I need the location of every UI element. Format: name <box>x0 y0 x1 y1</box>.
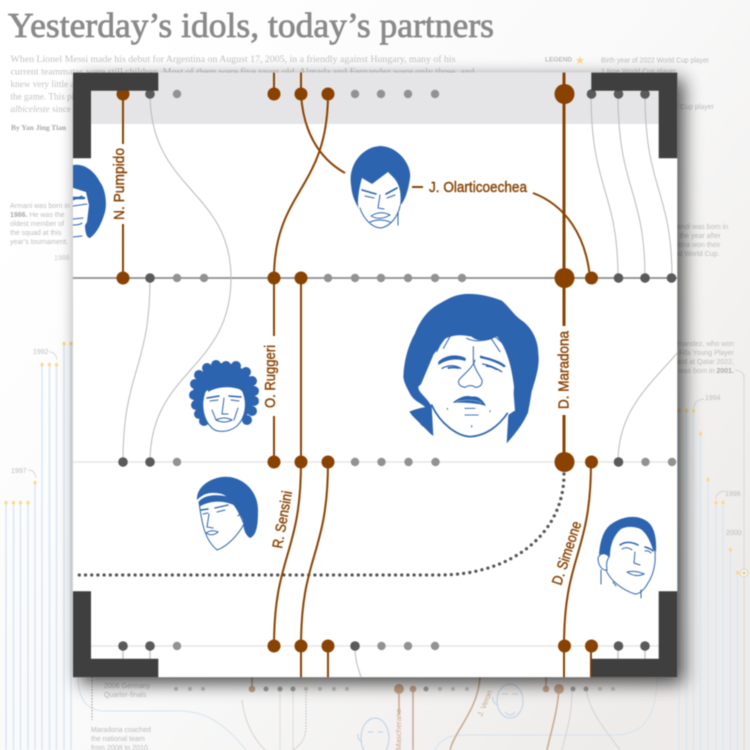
corner bracket: top right <box>591 73 677 158</box>
note: Armani: oldest member of <box>10 221 64 228</box>
grey connector lines <box>123 94 678 677</box>
label: N. Pumpido: N. Pumpido <box>112 148 128 220</box>
year lines left: 1992 <box>33 349 49 356</box>
lower faded timeline: J. Veron <box>476 689 494 718</box>
dots row 3 <box>118 452 676 472</box>
row lines <box>73 278 677 646</box>
note: Armani: year’s tournament. <box>10 239 68 246</box>
legend <box>545 54 715 111</box>
grey band <box>73 73 678 124</box>
legend: LEGEND <box>545 56 572 64</box>
corner bracket: bottom left <box>73 591 158 677</box>
intro text: When Lionel Messi made his debut for Argentina on August 17, 2005, in a friendly against Hungary, many of his <box>10 54 456 64</box>
dotted Maradona coach line <box>75 474 564 575</box>
note: Fernandez: was born in 2001. <box>678 368 734 375</box>
intro text: knew very little about <box>10 79 91 89</box>
year lines right <box>677 370 748 750</box>
lower faded timeline: 2006 Germany <box>104 683 151 690</box>
lower faded timeline: Quarter-finals <box>104 692 147 699</box>
label: R. Sensini: R. Sensini <box>270 490 296 550</box>
dots row 4 <box>118 640 650 652</box>
intro text: the game. This piece <box>10 92 86 102</box>
corner bracket: top left <box>73 73 158 158</box>
note: Armani: 1988 <box>54 255 70 262</box>
white panel <box>73 73 677 677</box>
note: Armani: 1986. He was the <box>10 212 65 219</box>
year lines left <box>4 341 73 750</box>
faded face <box>358 684 523 750</box>
note: right one: second World Cup. <box>660 251 719 258</box>
note: Armani <box>10 203 70 262</box>
legend: 1 time World Cup player <box>601 68 677 76</box>
intro text <box>10 54 475 114</box>
dots row 2 <box>116 268 676 288</box>
note: right one: Otamendi was born in <box>660 224 728 231</box>
byline: By Yan Jing Tian <box>11 123 67 132</box>
label: D. Simeone: D. Simeone <box>550 520 585 587</box>
note: right one: 1987, the year after <box>660 233 721 240</box>
lower faded timeline: Maradona coached <box>91 727 151 734</box>
portrait: Maradona <box>403 294 539 443</box>
title: Yesterday’s idols, today’s partners <box>8 6 494 45</box>
faded names: Mascherano <box>394 709 403 750</box>
note: Armani: Armani was born in <box>10 203 70 210</box>
note: Fernandez: the Fifa Young Player <box>667 350 735 357</box>
note: right one <box>660 224 728 258</box>
year lines left: 1997 <box>11 468 27 475</box>
icon: legend star: ★ <box>575 54 585 67</box>
note: Fernandez: award at Qatar 2022, <box>668 359 734 366</box>
dots row 1 <box>116 84 650 104</box>
note: right one: Argentina won their <box>660 242 721 249</box>
legend: Birth year of 2022 World Cup player <box>601 58 710 64</box>
note: Armani: the squad at this <box>10 230 62 237</box>
intro text: current teammates were still children. Most of them were five years old. Almada and Fernandez were only three, and <box>10 66 475 76</box>
year lines right: 2000 <box>726 530 742 537</box>
lower faded timeline: the national team <box>91 736 145 743</box>
portrait: Olarticoechea <box>351 146 410 228</box>
label: J. Olarticoechea: J. Olarticoechea <box>429 180 528 196</box>
brown player lines <box>123 72 591 678</box>
portrait: Simeone <box>598 517 656 598</box>
year lines right: 1998 <box>725 491 741 498</box>
note: Fernandez: Fernandez, who won <box>669 341 734 348</box>
legend: World Cup player <box>660 104 715 111</box>
year lines right: 1994 <box>705 395 721 402</box>
portrait: Sensini <box>197 477 258 550</box>
portrait: Pumpido <box>73 165 106 238</box>
portrait: Ruggeri <box>189 360 259 431</box>
label: D. Maradona: D. Maradona <box>556 330 572 409</box>
note: Fernandez <box>667 341 735 375</box>
label: O. Ruggeri: O. Ruggeri <box>263 345 279 408</box>
lower faded timeline <box>78 677 657 750</box>
main chart panel <box>73 72 678 678</box>
corner bracket: bottom right <box>591 591 677 677</box>
intro text: albiceleste since then <box>10 104 89 114</box>
